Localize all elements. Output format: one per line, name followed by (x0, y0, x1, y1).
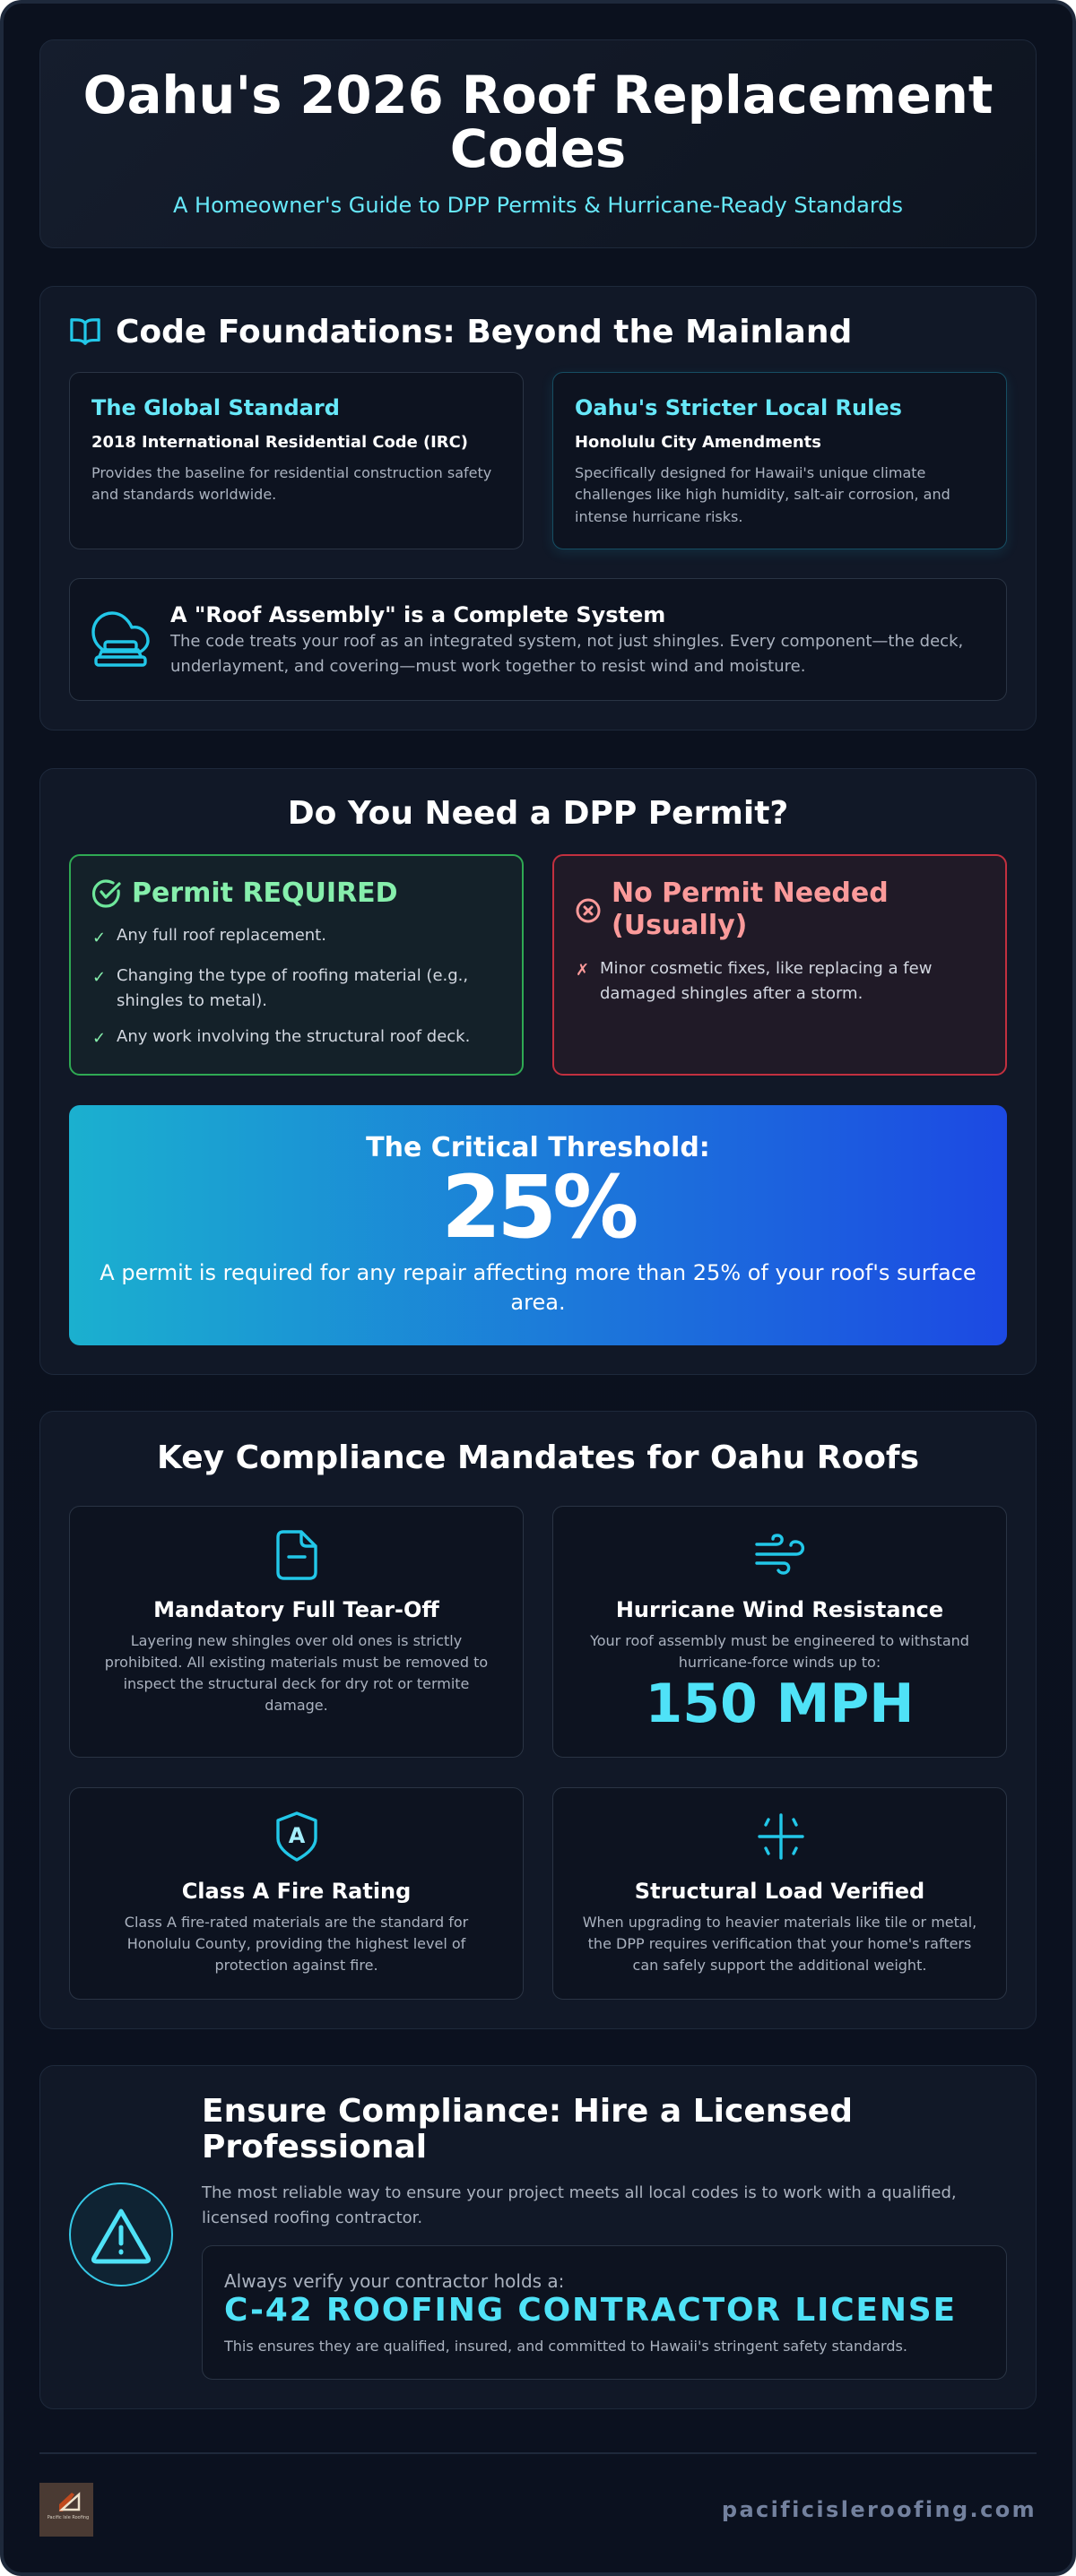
heading: code foundations: Code Foundations: Beyond the Mainland (116, 314, 852, 350)
card heading: The Global Standard (91, 395, 340, 420)
card: global standard (69, 372, 524, 549)
list item (117, 966, 468, 1010)
icon: shield A (276, 1811, 317, 1862)
card text: Provides the baseline for residential construction safety (91, 464, 491, 481)
card subheading: 2018 International Residential Code (IRC) (91, 432, 468, 452)
section text: licensed roofing contractor. (202, 2209, 422, 2227)
card heading: Class A Fire Rating (182, 1879, 411, 1904)
list check mark: ✓ (92, 968, 106, 987)
title: Oahu's 2026 Roof Replacement (83, 65, 993, 125)
callout: critical threshold (69, 1105, 1007, 1345)
list item: damaged shingles after a storm. (600, 984, 863, 1002)
callout text: A permit is required for any repair affecting more than 25% of your roof's surface (100, 1260, 976, 1285)
heading: hire a professional: Ensure Compliance: Hire a Licensed (202, 2093, 853, 2130)
card text: Specifically designed for Hawaii's unique climate (575, 464, 925, 481)
list: permit required items (92, 926, 470, 1048)
card heading: Oahu's Stricter Local Rules (575, 395, 902, 420)
card text (105, 1632, 488, 1714)
card text: Class A fire-rated materials are the standard for (125, 1914, 468, 1931)
card text: When upgrading to heavier materials like tile or metal, (583, 1914, 976, 1931)
heading: permit required: Permit REQUIRED (132, 877, 398, 909)
card: license (202, 2245, 1007, 2380)
panel: hire a licensed professional (39, 2065, 1037, 2409)
roof assembly text (170, 631, 963, 676)
card text (575, 464, 950, 525)
license intro: Always verify your contractor holds a: (224, 2270, 564, 2292)
card: structural load (552, 1787, 1007, 2000)
footer website: pacificisleroofing.com (722, 2497, 1037, 2522)
divider (39, 2452, 1037, 2454)
card text: and standards worldwide. (91, 486, 276, 503)
card text: prohibited. All existing materials must be removed to (105, 1654, 488, 1671)
roof assembly text: The code treats your roof as an integrated system, not just shingles. Every component—the deck, (170, 631, 963, 651)
icon: roof assembly cloud (91, 611, 150, 667)
icon: load burst (758, 1813, 804, 1860)
list item: Any work involving the structural roof deck. (117, 1027, 470, 1046)
heading: no permit: No Permit Needed (612, 877, 889, 909)
list item (600, 959, 932, 1002)
list check mark: ✓ (92, 1029, 106, 1048)
heading: mandates: Key Compliance Mandates for Oahu Roofs (157, 1439, 919, 1476)
footer logo: Pacific Isle Roofing (48, 2515, 89, 2520)
subtitle: A Homeowner's Guide to DPP Permits & Hurricane-Ready Standards (173, 193, 903, 218)
heading: hire a professional: Professional (202, 2129, 427, 2165)
card text: hurricane-force winds up to: (679, 1654, 881, 1671)
callout heading: The Critical Threshold: (366, 1132, 710, 1163)
title (83, 65, 993, 179)
card text (583, 1914, 976, 1974)
panel: permit (39, 768, 1037, 1375)
card heading: Mandatory Full Tear-Off (153, 1597, 439, 1622)
section text (201, 2183, 957, 2227)
list mark: ✗ (576, 961, 589, 980)
heading: hire a professional (202, 2093, 853, 2165)
card text: can safely support the additional weight. (633, 1957, 926, 1974)
list item: Minor cosmetic fixes, like replacing a few (600, 959, 932, 977)
roof assembly text: underlayment, and covering—must work together to resist wind and moisture. (170, 656, 805, 676)
section text: The most reliable way to ensure your project meets all local codes is to work with a qualified, (202, 2183, 957, 2202)
card subheading: Honolulu City Amendments (575, 432, 821, 452)
panel: compliance mandates (39, 1411, 1037, 2029)
icon: shield A: A (289, 1823, 306, 1848)
card text: damage. (265, 1697, 328, 1714)
panel: header (39, 39, 1037, 248)
card: tear-off (69, 1506, 524, 1757)
roof assembly heading: A "Roof Assembly" is a Complete System (170, 602, 665, 627)
card text: the DPP requires verification that your home's rafters (588, 1935, 971, 1952)
card: no permit (552, 854, 1007, 1076)
license name: C-42 ROOFING CONTRACTOR LICENSE (224, 2291, 957, 2329)
title: Codes (450, 119, 626, 179)
list item: Changing the type of roofing material (e.g., (117, 966, 468, 985)
icon: x circle (576, 898, 601, 923)
license note: This ensures they are qualified, insured, and committed to Hawaii's stringent safety standards. (224, 2338, 907, 2355)
card text: protection against fire. (214, 1957, 378, 1974)
footer logo (39, 2483, 93, 2537)
card text: challenges like high humidity, salt-air corrosion, and (575, 486, 950, 503)
card: roof assembly (69, 578, 1007, 701)
card heading: Structural Load Verified (635, 1879, 924, 1904)
card: wind resistance (552, 1506, 1007, 1757)
card text: Honolulu County, providing the highest level of (127, 1935, 465, 1952)
card: fire rating (69, 1787, 524, 2000)
icon: wind (755, 1534, 805, 1575)
card text: Layering new shingles over old ones is strictly (131, 1632, 462, 1649)
list item: Any full roof replacement. (117, 926, 326, 945)
callout text: area. (510, 1290, 566, 1315)
callout text (100, 1260, 976, 1315)
heading: no permit: (Usually) (612, 910, 747, 941)
card text (91, 464, 491, 503)
card text: inspect the structural deck for dry rot or termite (124, 1675, 469, 1692)
card: permit required (69, 854, 524, 1076)
icon: open book (70, 318, 100, 345)
list item: shingles to metal). (117, 991, 267, 1010)
card text: Your roof assembly must be engineered to withstand (590, 1632, 969, 1649)
heading: permit: Do You Need a DPP Permit? (288, 795, 788, 832)
card text (125, 1914, 468, 1974)
card text: intense hurricane risks. (575, 508, 742, 525)
list check mark: ✓ (92, 929, 106, 947)
card heading: Hurricane Wind Resistance (616, 1597, 943, 1622)
card: local rules (552, 372, 1007, 549)
heading: no permit (612, 877, 889, 941)
panel: code foundations (39, 286, 1037, 730)
big number: 25% (441, 1157, 635, 1258)
icon: warning circle (69, 2183, 173, 2286)
wind speed stat: 150 MPH (645, 1673, 915, 1735)
card text (590, 1632, 969, 1671)
icon: check circle (91, 879, 121, 908)
icon: document (276, 1530, 317, 1580)
